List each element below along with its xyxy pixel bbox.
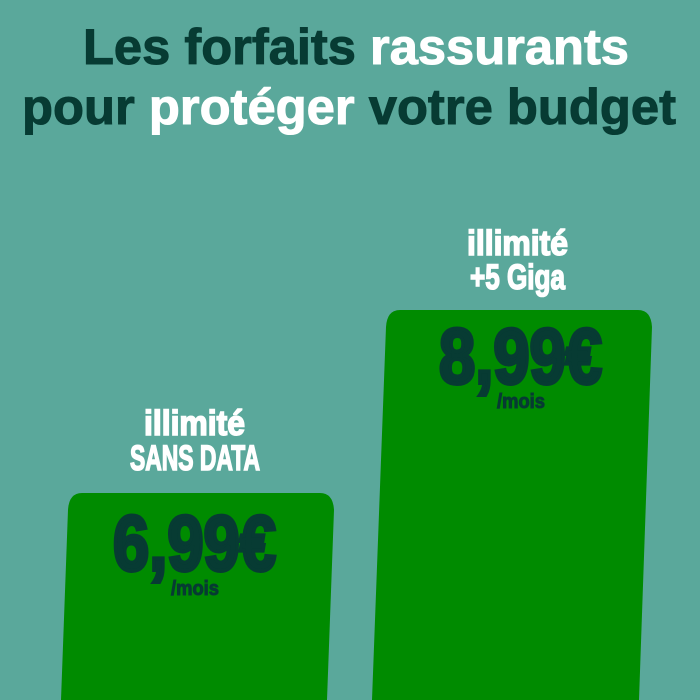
label: +5 Giga: [470, 258, 565, 297]
bar: [372, 310, 652, 700]
label: illimité: [144, 404, 245, 443]
label: SANS DATA: [130, 439, 260, 478]
price: 6,99€: [113, 499, 276, 587]
label: [130, 404, 260, 478]
per month: /mois: [171, 578, 219, 600]
title: [22, 19, 676, 135]
label: [467, 224, 568, 297]
panel: illimité +5 Giga: [372, 224, 652, 700]
title line 1: Les forfaits rassurants: [83, 19, 629, 75]
title line 2: pour protéger votre budget: [22, 79, 676, 135]
panel: illimité sans data: [61, 404, 334, 700]
per month: /mois: [497, 391, 545, 413]
label: illimité: [467, 224, 568, 263]
bar: [61, 493, 334, 700]
price: 8,99€: [439, 312, 602, 400]
